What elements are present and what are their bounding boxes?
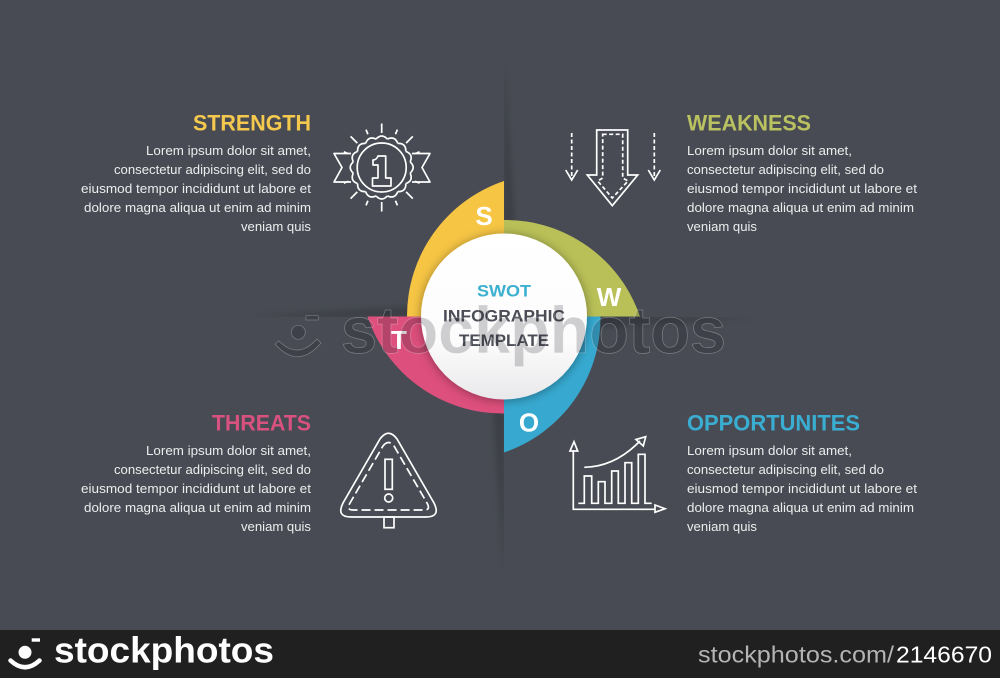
panel: threats xyxy=(81,410,436,534)
icon: growth chart xyxy=(570,437,665,512)
watermark logo xyxy=(275,316,321,357)
icon: medal with number one xyxy=(334,124,430,212)
center title: INFOGRAPHIC xyxy=(443,306,565,326)
text block: weakness xyxy=(687,144,918,234)
footer bar xyxy=(0,630,1000,678)
text block: strength: dolore magna aliqua ut enim ad minim xyxy=(84,201,311,215)
footer image id xyxy=(698,641,992,667)
text block: weakness: consectetur adipiscing elit, sed do xyxy=(687,163,884,177)
heading: opportunities: OPPORTUNITES xyxy=(687,410,860,436)
center title: SWOT xyxy=(477,282,532,301)
chart: SWOT pinwheel xyxy=(368,181,640,452)
watermark wordmark: stockphotos xyxy=(341,293,726,367)
segment: O blue xyxy=(504,316,601,452)
text block: strength: consectetur adipiscing elit, sed do xyxy=(114,163,311,177)
panel: weakness xyxy=(566,110,918,234)
segment: T pink xyxy=(368,316,504,414)
heading: strength: STRENGTH xyxy=(193,110,311,136)
text block: weakness: veniam quis xyxy=(687,220,757,234)
footer logo xyxy=(10,638,40,667)
footer wordmark: stockphotos xyxy=(54,630,274,671)
text block: weakness: eiusmod tempor incididunt ut labore et xyxy=(687,182,918,196)
text block: threats xyxy=(81,444,312,534)
segment: W green xyxy=(504,220,640,316)
text block: strength: Lorem ipsum dolor sit amet, xyxy=(146,144,311,158)
text block: strength: veniam quis xyxy=(241,220,311,234)
heading: weakness: WEAKNESS xyxy=(687,110,811,136)
panel: strength xyxy=(81,110,430,234)
text block: opportunities: eiusmod tempor incididunt ut labore et xyxy=(687,482,918,496)
text block: threats: dolore magna aliqua ut enim ad minim xyxy=(84,501,311,515)
footer image id: 2146670 xyxy=(896,641,992,667)
icon: down arrows xyxy=(566,130,660,206)
text block: threats: eiusmod tempor incididunt ut labore et xyxy=(81,482,312,496)
segment: T pink: T xyxy=(391,325,407,355)
text block: opportunities: consectetur adipiscing elit, sed do xyxy=(687,463,884,477)
text block: strength xyxy=(81,144,312,234)
text block: opportunities xyxy=(687,444,918,534)
text block: opportunities: dolore magna aliqua ut enim ad minim xyxy=(687,501,914,515)
text block: threats: Lorem ipsum dolor sit amet, xyxy=(146,444,311,458)
text block: threats: veniam quis xyxy=(241,520,311,534)
segment: O blue: O xyxy=(519,408,539,438)
icon: warning sign xyxy=(341,433,436,528)
text block: threats: consectetur adipiscing elit, sed do xyxy=(114,463,311,477)
text block: weakness: Lorem ipsum dolor sit amet, xyxy=(687,144,852,158)
text block: strength: eiusmod tempor incididunt ut labore et xyxy=(81,182,312,196)
quadrant fold shadows xyxy=(318,132,686,510)
segment: S yellow: S xyxy=(475,201,493,231)
segment: W green: W xyxy=(597,282,622,312)
panel: opportunities xyxy=(570,410,918,534)
center title: TEMPLATE xyxy=(459,331,549,350)
segment: S yellow xyxy=(407,181,504,316)
watermark xyxy=(275,293,726,367)
center title xyxy=(443,282,565,350)
text block: opportunities: Lorem ipsum dolor sit amet, xyxy=(687,444,852,458)
heading: threats: THREATS xyxy=(212,410,311,436)
center circle xyxy=(421,234,587,400)
text block: opportunities: veniam quis xyxy=(687,520,757,534)
text block: weakness: dolore magna aliqua ut enim ad minim xyxy=(687,201,914,215)
footer image id: stockphotos.com/ xyxy=(698,641,895,667)
